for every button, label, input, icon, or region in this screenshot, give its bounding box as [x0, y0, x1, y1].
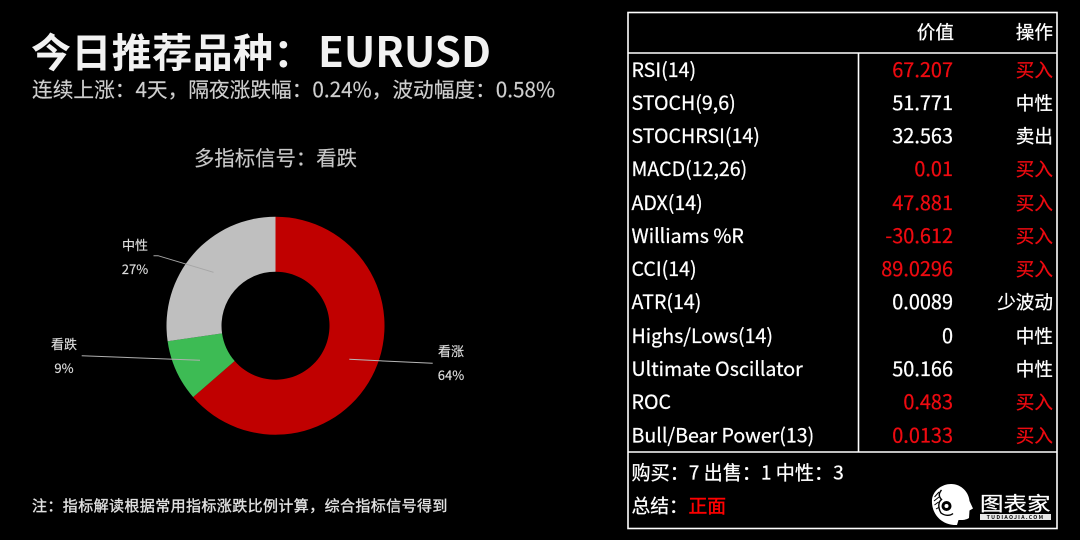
row: CCI: CCI(14) — [632, 253, 697, 282]
leader line: bullish — [349, 359, 433, 363]
label: bullish: 64% — [438, 365, 464, 384]
row: Ultimate Oscillator — [632, 353, 1053, 382]
leader line: neutral — [154, 256, 214, 272]
label: neutral: 中性 — [122, 235, 148, 254]
title: EURUSD — [318, 19, 491, 80]
row: Williams %R: 买入 — [1016, 222, 1053, 249]
subtitle: key stats: 连续上涨：4天，隔夜涨跌幅：0.24%，波动幅度：0.58% — [32, 73, 555, 103]
row: RSI: RSI(14) — [632, 54, 696, 83]
row: MACD: 0.01 — [914, 153, 953, 182]
row: Ultimate Oscillator: Ultimate Oscillator — [632, 353, 803, 382]
row: ADX — [632, 187, 1053, 216]
row: ADX: 47.881 — [892, 187, 953, 216]
logo: tubiaojia — [932, 484, 1051, 525]
row: STOCH: STOCH(9,6) — [632, 87, 736, 116]
row: ROC: 0.483 — [903, 386, 953, 415]
row: RSI — [632, 54, 1053, 83]
footnote: 注：指标解读根据常用指标涨跌比例计算，综合指标信号得到 — [32, 495, 448, 516]
row: ROC: 买入 — [1016, 388, 1053, 415]
row: Bull/Bear Power — [632, 420, 1053, 448]
row: ATR: 少波动 — [997, 288, 1053, 315]
panel: indicator table — [628, 12, 1057, 528]
summary counts: 购买：7 出售：1 中性：3 — [632, 458, 844, 486]
row: RSI: 买入 — [1016, 56, 1053, 83]
table header: 价值 — [917, 18, 954, 45]
label: neutral: 27% — [122, 259, 148, 278]
row: CCI: 买入 — [1016, 255, 1053, 282]
row: Williams %R: -30.612 — [885, 220, 953, 249]
label: bullish — [438, 341, 464, 384]
row: ATR: 0.0089 — [892, 286, 953, 315]
label: bullish: 看涨 — [438, 341, 464, 360]
row: MACD: 买入 — [1016, 155, 1053, 182]
row: Highs/Lows — [632, 320, 1053, 349]
conclusion: 正面 — [688, 492, 726, 518]
table header: 操作 — [1016, 18, 1053, 45]
row: CCI: 89.0296 — [881, 253, 953, 282]
row: Highs/Lows: 中性 — [1016, 322, 1053, 349]
label: neutral — [122, 235, 148, 278]
row: STOCHRSI: STOCHRSI(14) — [632, 120, 760, 149]
row: Ultimate Oscillator: 50.166 — [892, 353, 953, 382]
row: ATR: ATR(14) — [632, 286, 701, 315]
row: STOCHRSI: 32.563 — [892, 120, 953, 149]
segment: bearish 9% — [168, 333, 235, 397]
segment: neutral 27% — [167, 217, 276, 341]
row: STOCHRSI — [632, 120, 1053, 149]
conclusion — [632, 492, 726, 518]
donut chart — [51, 217, 464, 435]
table frame — [628, 12, 1057, 528]
row: Ultimate Oscillator: 中性 — [1016, 355, 1053, 382]
segment: bullish 64% — [193, 217, 385, 435]
title — [31, 19, 491, 80]
leader line: bearish — [82, 356, 200, 360]
row: RSI: 67.207 — [892, 54, 953, 83]
row: ADX: ADX(14) — [632, 187, 703, 216]
row: ROC — [632, 386, 1053, 415]
row: Williams %R: Williams %R — [632, 220, 744, 249]
row: Highs/Lows: 0 — [942, 320, 953, 349]
row: Bull/Bear Power: 买入 — [1016, 422, 1053, 448]
row: MACD — [632, 153, 1053, 182]
row: Highs/Lows: Highs/Lows(14) — [632, 320, 773, 349]
row: ATR — [632, 286, 1053, 315]
row: MACD: MACD(12,26) — [632, 153, 747, 182]
row: STOCH: 51.771 — [892, 87, 953, 116]
row: Williams %R — [632, 220, 1053, 249]
row: Bull/Bear Power: 0.0133 — [892, 420, 953, 448]
title: 今日推荐品种： — [31, 21, 314, 79]
label: bearish: 看跌 — [51, 334, 77, 353]
icon: robot head — [932, 484, 973, 525]
row: ROC: ROC — [632, 386, 671, 415]
row: CCI — [632, 253, 1053, 282]
row: STOCH: 中性 — [1016, 89, 1053, 116]
label: bearish: 9% — [54, 358, 74, 377]
row: ADX: 买入 — [1016, 189, 1053, 216]
table header — [917, 18, 1053, 45]
row: STOCH — [632, 87, 1053, 116]
row: STOCHRSI: 卖出 — [1016, 122, 1053, 149]
chart heading: 多指标信号：看跌 — [194, 142, 357, 172]
row: Bull/Bear Power: Bull/Bear Power(13) — [632, 420, 814, 448]
logo wordmark: 图表家 — [980, 489, 1050, 517]
label: bearish — [51, 334, 77, 377]
conclusion: 总结： — [632, 492, 688, 518]
logo url bar: TUDIAOJIA.COM — [987, 514, 1044, 521]
